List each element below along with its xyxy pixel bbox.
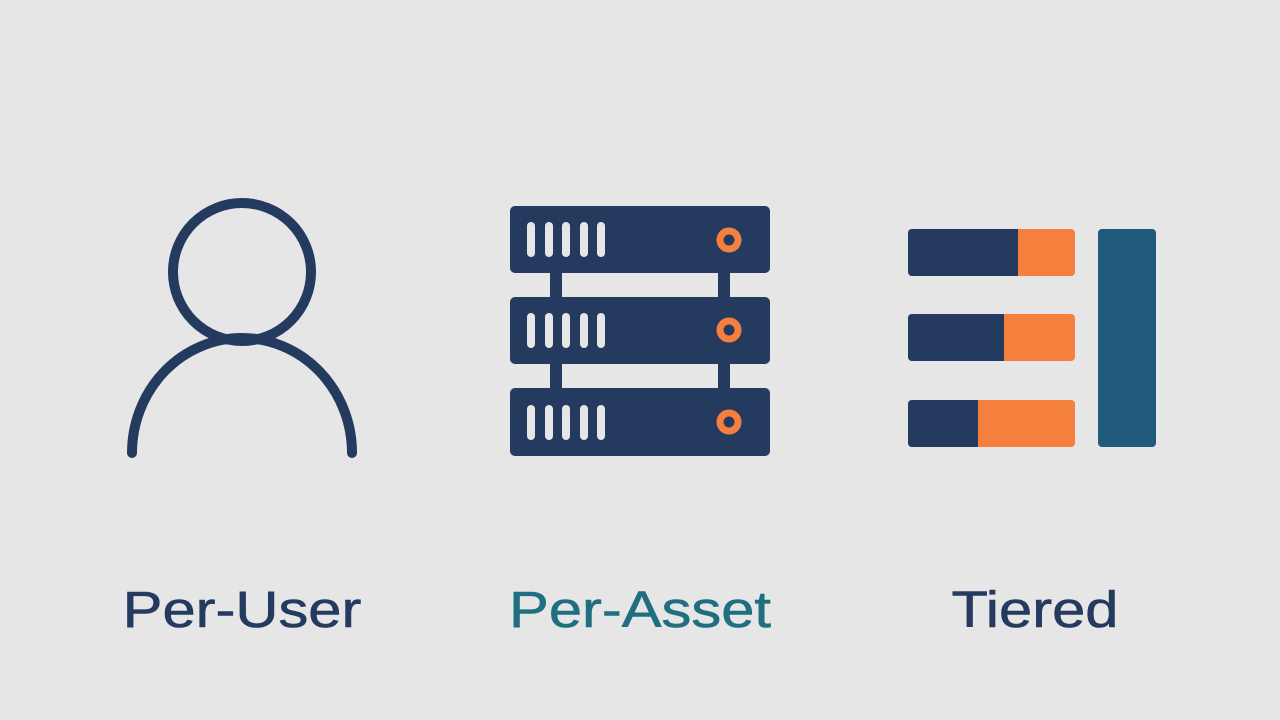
icon: server rack	[510, 206, 770, 456]
label: Per-Asset: Per-Asset	[509, 581, 771, 638]
label: Per-User: Per-User	[123, 581, 361, 638]
icon: tiered bars	[908, 229, 1156, 447]
label: Tiered: Tiered	[952, 581, 1118, 638]
icon: person	[132, 203, 352, 453]
